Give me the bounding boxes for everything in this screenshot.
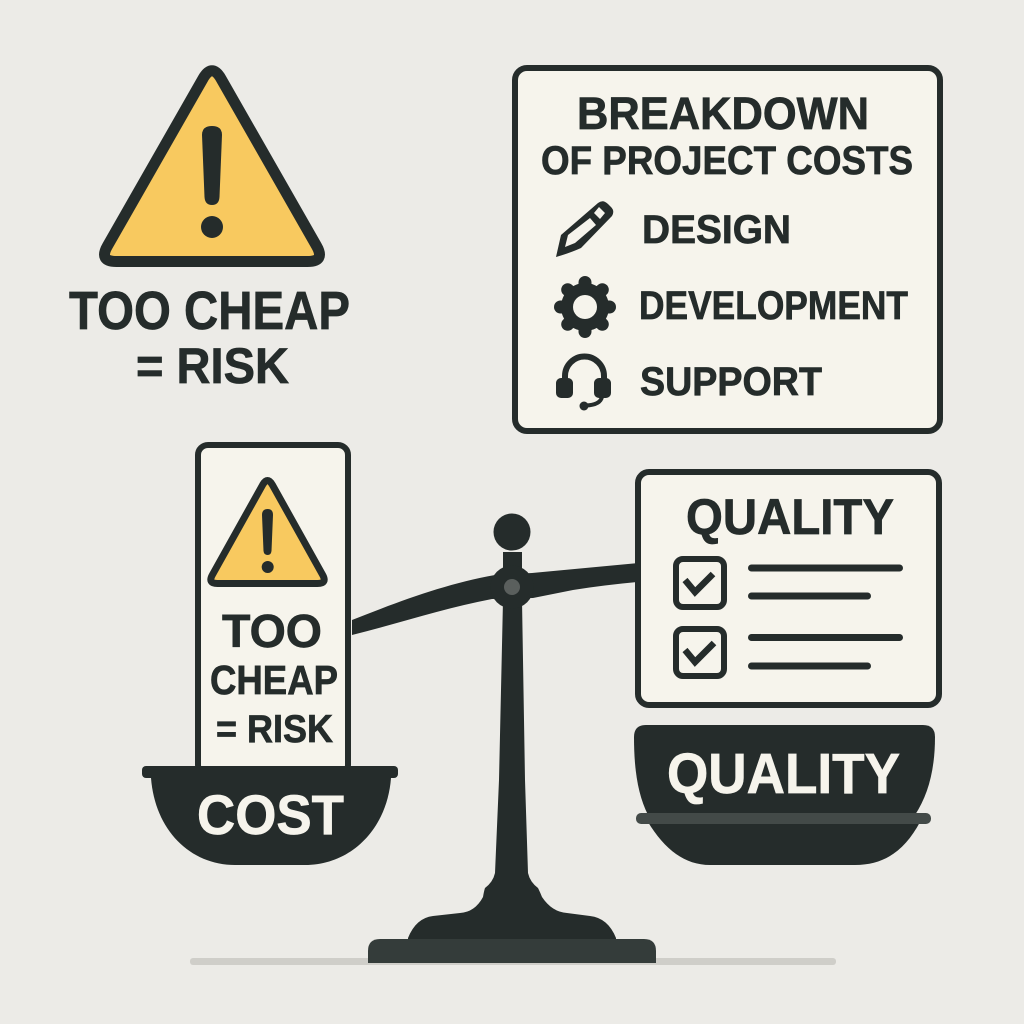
panel heading: BREAKDOWN xyxy=(577,88,869,139)
scale beam xyxy=(352,563,638,635)
pan: cost: COST xyxy=(197,783,344,846)
sign text xyxy=(210,605,338,751)
scale ground line xyxy=(190,958,836,965)
icon: small warning triangle xyxy=(211,481,324,584)
pan: cost xyxy=(142,766,398,865)
label: development: DEVELOPMENT xyxy=(639,284,908,328)
checkbox row 1 xyxy=(676,559,900,607)
panel: cost side sign xyxy=(198,445,348,775)
sign text: TOO xyxy=(222,605,322,657)
label: design: DESIGN xyxy=(642,208,791,252)
scale top knob xyxy=(494,514,530,550)
icon: pencil xyxy=(556,201,613,257)
checklist heading: QUALITY xyxy=(686,489,894,545)
panel: breakdown of project costs xyxy=(515,68,940,431)
pan: quality xyxy=(634,725,935,865)
scale base xyxy=(368,939,656,963)
pan: quality: QUALITY xyxy=(667,742,900,806)
panel heading xyxy=(541,88,913,183)
label: support: SUPPORT xyxy=(640,360,822,404)
heading: too cheap = risk xyxy=(69,281,350,394)
panel heading: OF PROJECT COSTS xyxy=(541,139,913,183)
scale hub xyxy=(490,566,534,608)
icon: gear xyxy=(560,282,610,332)
checkbox row 2 xyxy=(676,629,900,676)
panel: quality checklist xyxy=(638,472,939,705)
heading: too cheap = risk: = RISK xyxy=(136,338,289,394)
scale stand xyxy=(352,514,656,963)
icon: headset xyxy=(556,356,611,410)
sign text: CHEAP xyxy=(210,657,338,703)
heading: too cheap = risk: TOO CHEAP xyxy=(69,281,350,341)
sign text: = RISK xyxy=(216,708,333,751)
warning icon: large triangle xyxy=(104,71,320,262)
scale pillar xyxy=(408,600,616,941)
